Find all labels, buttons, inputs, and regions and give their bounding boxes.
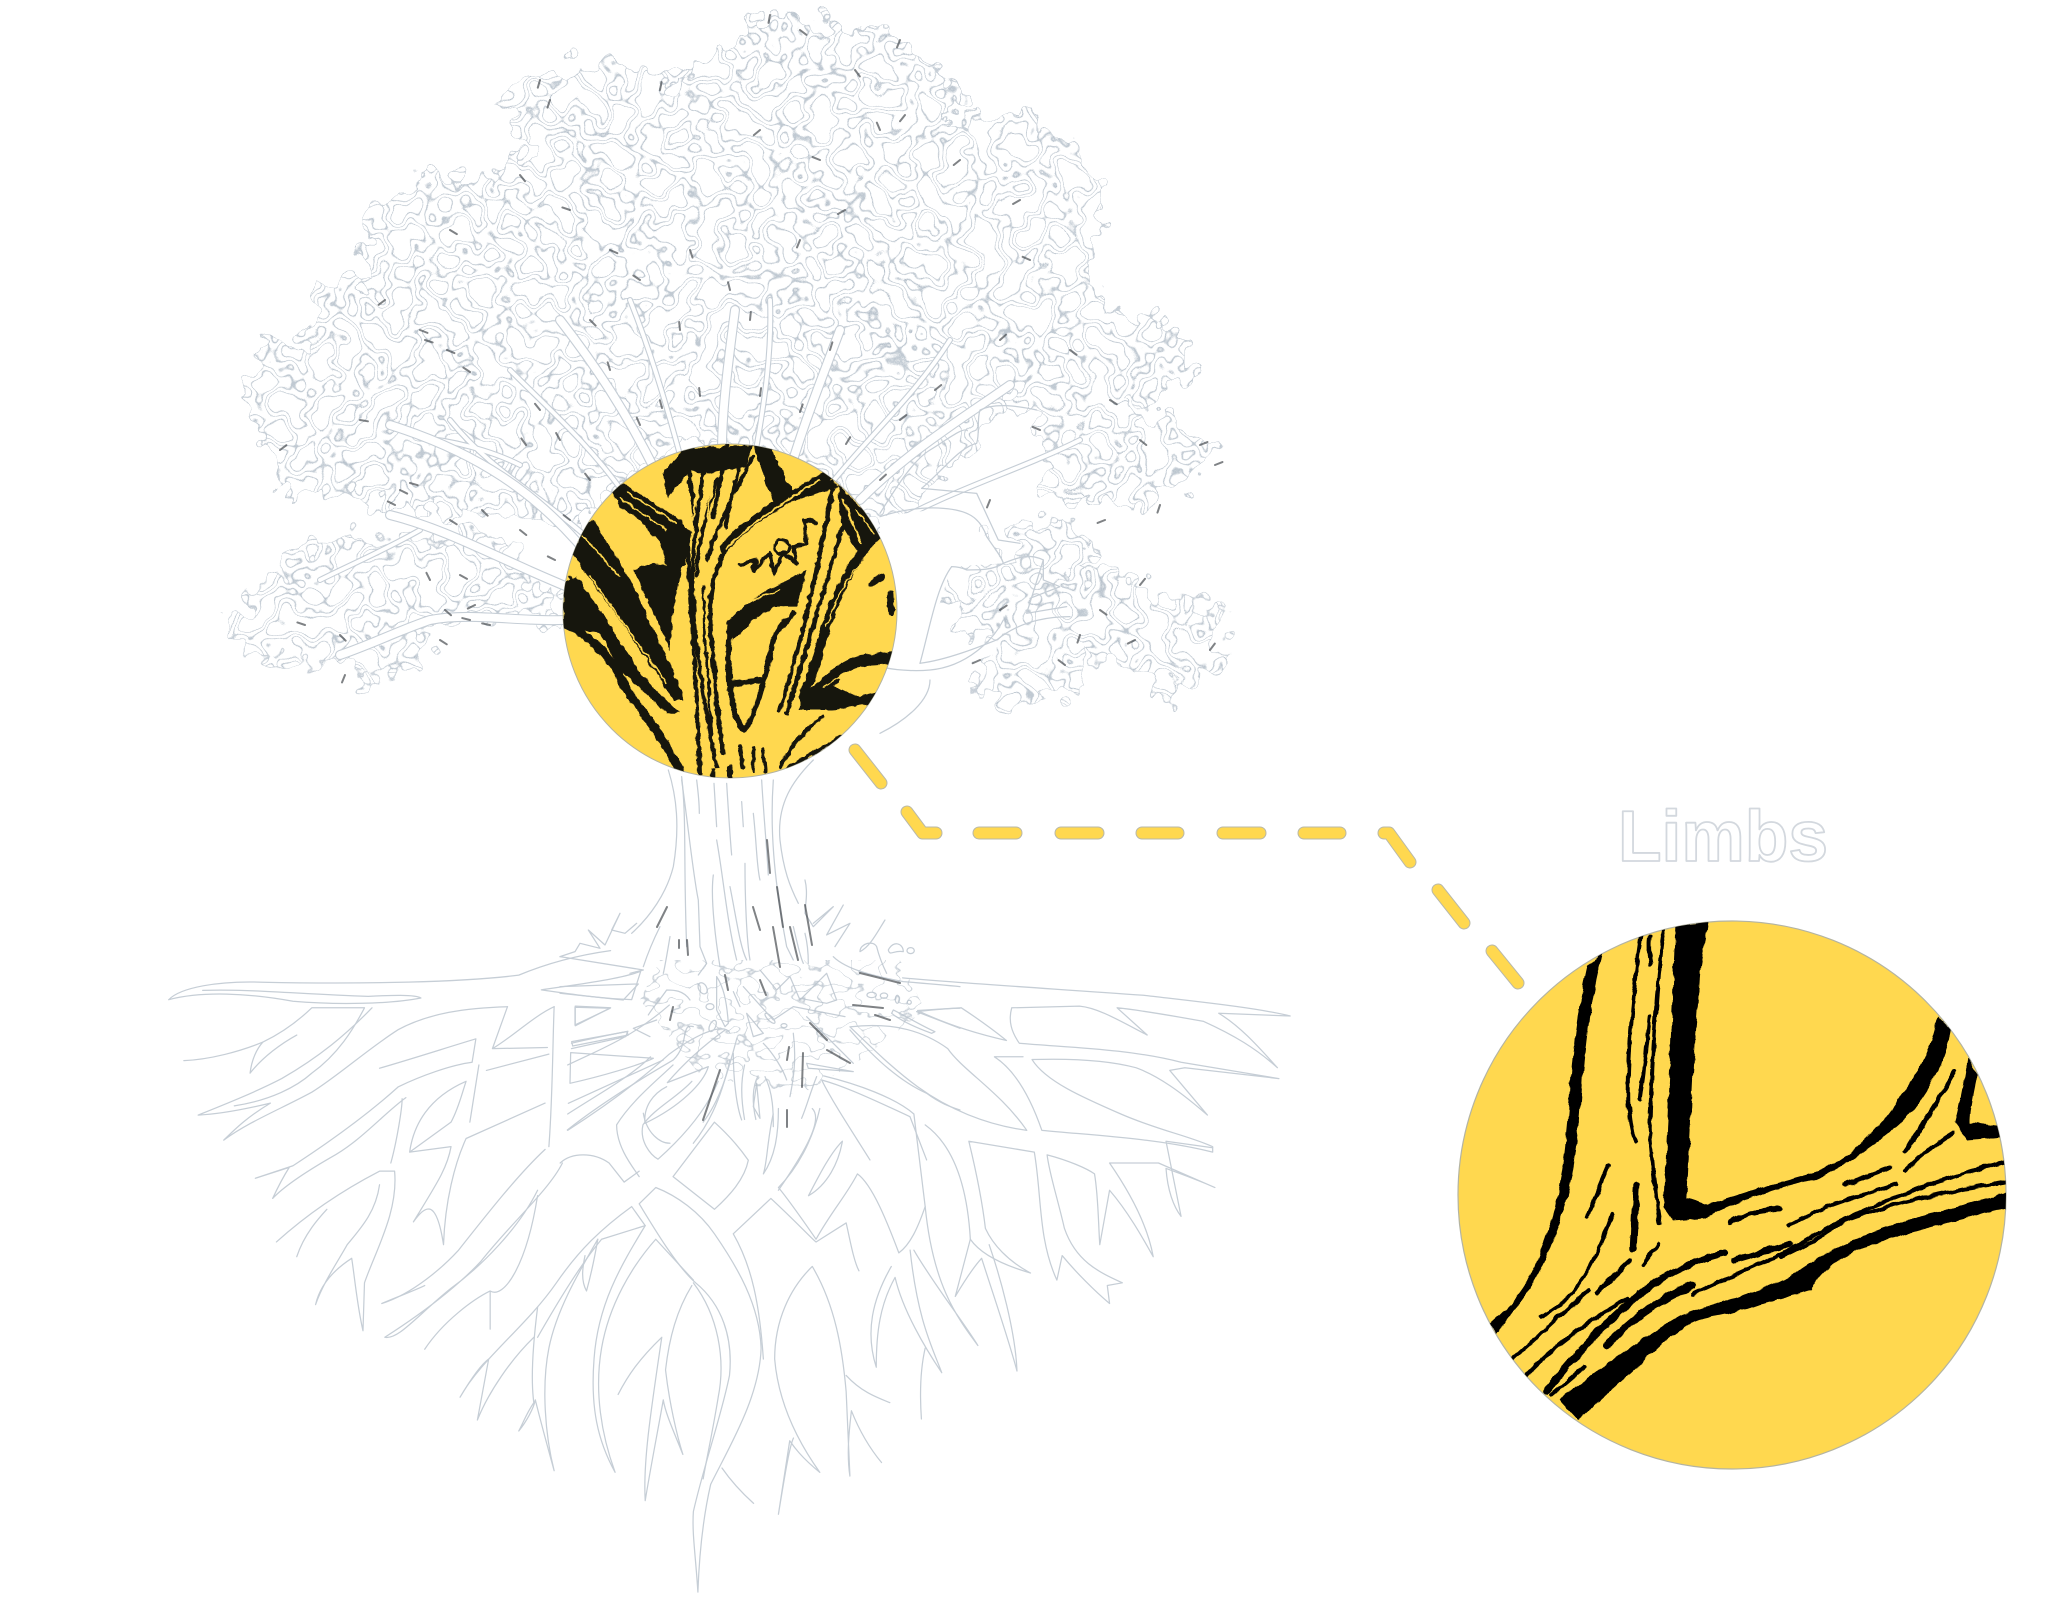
canopy foliage outline [228,7,1234,714]
connector yellow dash [855,750,1518,983]
enlarged yellow detail circle [1458,921,2010,1469]
heading: Limbs: Limbs [1618,797,1828,877]
dark ink marks on trunk and root crown [657,840,900,1127]
trunk [560,760,960,1160]
dark ink marks in canopy [280,15,1225,685]
detail circle: limb fork drawing [1490,921,2010,1421]
trunk base ink texture [640,960,922,1094]
canopy limbs [320,300,1080,655]
canopy silhouette edge [232,15,1233,707]
tree illustration [150,0,1350,1592]
connector grey edge [855,750,1518,983]
small yellow magnifier circle [563,444,897,778]
dashed connector [855,750,1518,983]
root system [169,951,1290,1592]
lower right limbs [880,406,1070,733]
small circle: limb ink drawing [563,445,893,777]
